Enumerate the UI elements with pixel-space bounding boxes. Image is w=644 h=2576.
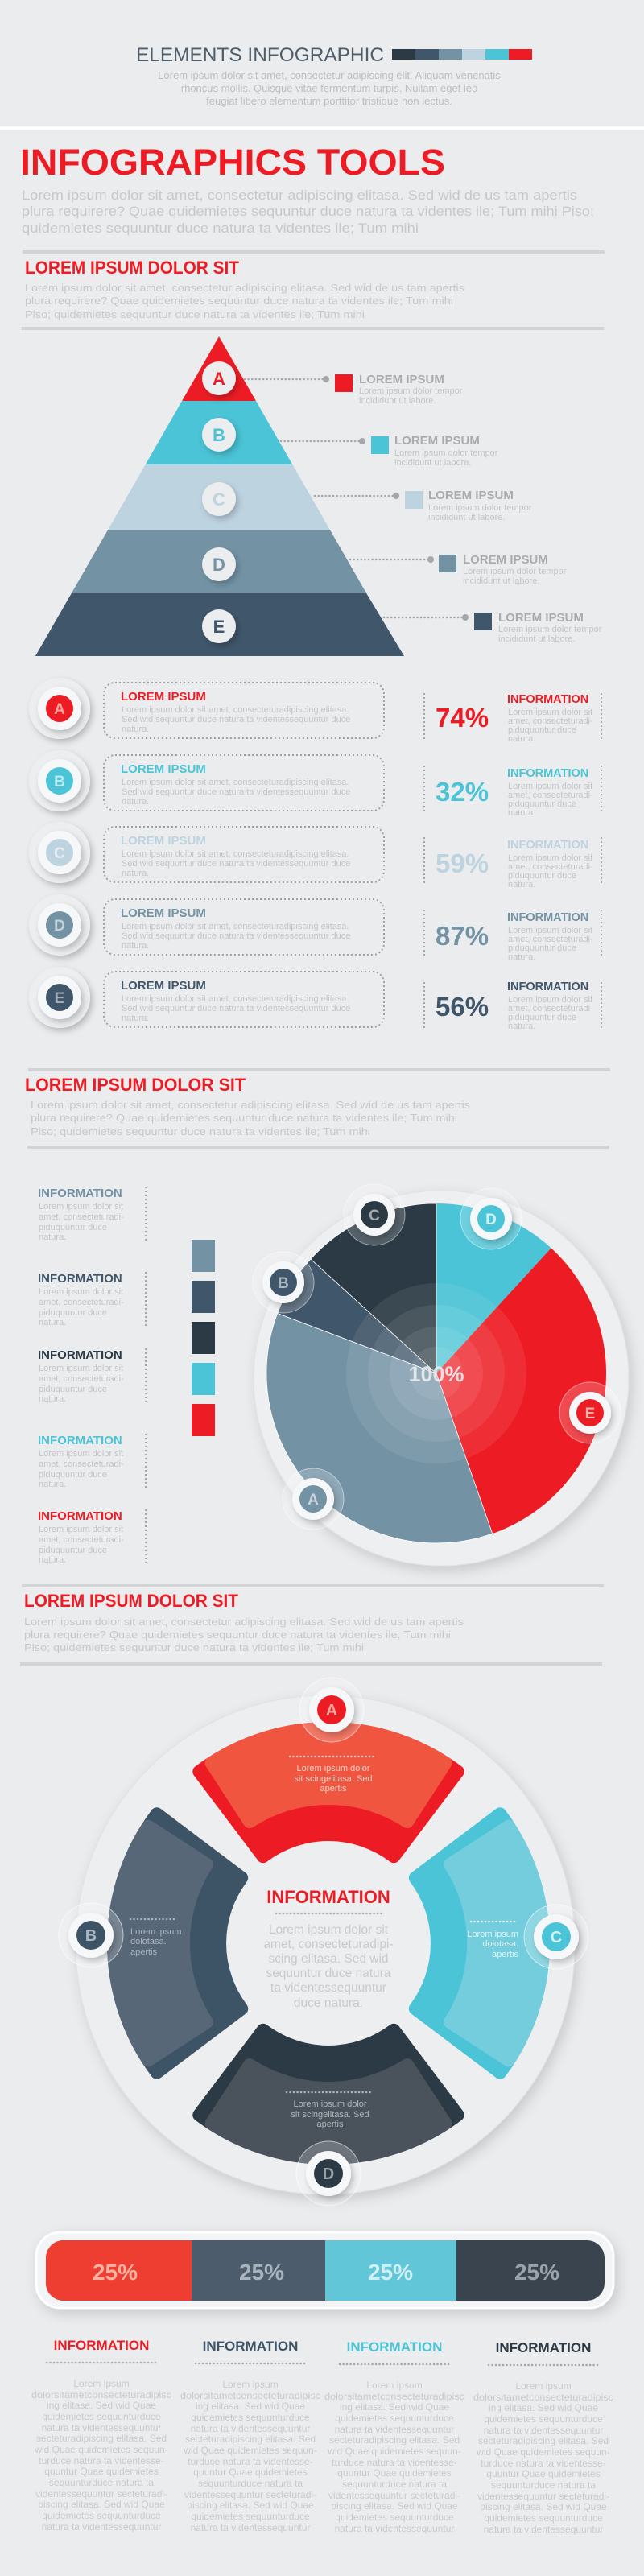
column 2: ing elitasa. Sed wid Quae xyxy=(196,2401,305,2412)
row E: Lorem ipsum dolor sit amet, consecteturadipiscing elitasa. xyxy=(122,994,349,1004)
row C: INFORMATION xyxy=(507,839,588,852)
column 3: dolorsitametconsecteturadipisc xyxy=(324,2391,464,2402)
pie info list: amet, consecteturadi- xyxy=(39,1535,124,1545)
pie info list xyxy=(38,1187,146,1565)
row A: LOREM IPSUM xyxy=(121,690,206,704)
row C: natura. xyxy=(122,869,149,878)
row B: natura. xyxy=(508,808,535,818)
row A: Lorem ipsum dolor sit xyxy=(508,708,592,717)
ring markers xyxy=(59,1678,588,2206)
ring diagram: dolotasa. xyxy=(482,1939,518,1949)
column 1: dolorsitametconsecteturadipisc xyxy=(31,2389,171,2401)
column 1: ing elitasa. Sed wid Quae xyxy=(47,2400,156,2411)
segment texts: Lorem ipsum dolor xyxy=(296,1764,370,1773)
heading: section 3: Lorem ipsum dolor sit amet, consectetur adipiscing elitasa. Sed wid de us tam apertis xyxy=(24,1616,464,1628)
row D: natura. xyxy=(508,952,535,962)
pie info list: Lorem ipsum dolor sit xyxy=(39,1287,123,1297)
pie info list: Lorem ipsum dolor sit xyxy=(39,1525,123,1534)
column 1: quidemietes sequunturduce xyxy=(42,2510,161,2521)
intro text: Lorem ipsum dolor sit amet, consectetur adipiscing elitasa. Sed wid de us tam apertis xyxy=(22,188,577,203)
column 3 xyxy=(324,2339,464,2534)
pie info list: natura. xyxy=(39,1480,66,1489)
header: elements infographic: rhoncus mollis. Quisque vitae fermentum turpis. Nullam eget leo xyxy=(181,82,477,94)
column 3: piscing elitasa. Sed wid Quae xyxy=(331,2500,458,2512)
column 2: natura ta videntessequuntur xyxy=(191,2423,310,2434)
intro text xyxy=(22,188,594,236)
bottom info columns xyxy=(31,2338,613,2535)
row B: INFORMATION xyxy=(507,767,588,780)
pyramid callouts: LOREM IPSUM xyxy=(359,373,444,386)
pyramid callouts: LOREM IPSUM xyxy=(498,611,584,625)
row B: amet, consecteturadi- xyxy=(508,791,593,800)
segment texts: sit scingelitasa. Sed xyxy=(294,1774,373,1784)
segment D xyxy=(199,2030,458,2158)
column 4: sequunturduce natura ta xyxy=(491,2479,596,2491)
ring diagram: dolotasa. xyxy=(130,1937,167,1946)
pie chart xyxy=(254,1191,629,1566)
column 1: INFORMATION xyxy=(54,2338,149,2353)
pie info list: piduquuntur duce xyxy=(39,1546,107,1555)
row A: piduquuntur duce xyxy=(508,725,576,735)
pie markers: E xyxy=(585,1406,595,1422)
row B: piduquuntur duce xyxy=(508,799,576,809)
segment texts: apertis xyxy=(320,1784,347,1794)
heading: section 2: Lorem ipsum dolor sit amet, consectetur adipiscing elitasa. Sed wid de us tam apertis xyxy=(31,1099,471,1111)
row A xyxy=(29,678,601,744)
pie info list: INFORMATION xyxy=(38,1272,122,1286)
column 2: dolorsitametconsecteturadipisc xyxy=(180,2390,320,2401)
pie markers: C xyxy=(369,1208,380,1224)
row B: B xyxy=(54,774,65,791)
segment A xyxy=(199,1728,458,1856)
column 4 xyxy=(473,2340,613,2535)
center information: duce natura. xyxy=(294,1996,363,2010)
center information: amet, consecteturadipi- xyxy=(263,1938,394,1951)
heading: section 3 xyxy=(24,1591,464,1653)
pie info list: natura. xyxy=(39,1555,66,1565)
row C: natura. xyxy=(508,880,535,890)
column 3: natura ta videntessequuntur xyxy=(335,2424,454,2435)
ring diagram: sit scingelitasa. Sed xyxy=(291,2110,369,2120)
row D: INFORMATION xyxy=(507,911,588,924)
percentage bar: 25% xyxy=(239,2260,284,2285)
pie info list: amet, consecteturadi- xyxy=(39,1459,124,1469)
pie info list: piduquuntur duce xyxy=(39,1385,107,1394)
pyramid callouts: incididunt ut labore. xyxy=(359,396,436,406)
row C: Sed wid sequuntur duce natura ta videntessequuntur duce xyxy=(122,859,350,869)
column 4: dolorsitametconsecteturadipisc xyxy=(473,2392,613,2403)
column 1: piscing elitasa. Sed wid Quae xyxy=(38,2499,165,2510)
intro text: plura requirere? Quae quidemietes sequuntur duce natura ta videntes ile; Tum mihi Piso; xyxy=(22,204,594,219)
row B: Sed wid sequuntur duce natura ta videntessequuntur duce xyxy=(122,787,350,797)
row B: LOREM IPSUM xyxy=(121,762,206,776)
row D: Sed wid sequuntur duce natura ta videntessequuntur duce xyxy=(122,931,350,941)
row E: amet, consecteturadi- xyxy=(508,1004,593,1013)
row C: LOREM IPSUM xyxy=(121,834,206,848)
segment B xyxy=(114,1814,242,2073)
ring diagram xyxy=(76,1695,575,2194)
center information: scing elitasa. Sed wid xyxy=(268,1952,389,1966)
pyramid callouts: incididunt ut labore. xyxy=(394,458,471,468)
pyramid callouts: LOREM IPSUM xyxy=(428,489,514,502)
row A: Lorem ipsum dolor sit amet, consecteturadipiscing elitasa. xyxy=(122,705,349,715)
pyramid callouts: LOREM IPSUM xyxy=(463,553,548,567)
row A: natura. xyxy=(508,734,535,744)
column 3: quidemietes sequunturduce xyxy=(335,2512,454,2523)
row D: Lorem ipsum dolor sit xyxy=(508,926,592,935)
row E: LOREM IPSUM xyxy=(121,979,206,993)
heading: section 1: LOREM IPSUM DOLOR SIT xyxy=(25,258,240,278)
column 3: Lorem ipsum xyxy=(366,2380,423,2391)
pyramid callouts: Lorem ipsum dolor tempor xyxy=(463,567,567,576)
column 4: wid Quae quidemietes sequun- xyxy=(476,2446,610,2458)
ring diagram: apertis xyxy=(316,2120,344,2129)
column 4: turduce natura ta videntesse- xyxy=(481,2458,606,2469)
pie info list: INFORMATION xyxy=(38,1187,122,1200)
pie info list: INFORMATION xyxy=(38,1509,122,1523)
column 4: secteturadipiscing elitasa. Sed xyxy=(478,2435,609,2446)
row A: natura. xyxy=(122,724,149,734)
heading: section 2: LOREM IPSUM DOLOR SIT xyxy=(25,1075,246,1095)
row E xyxy=(29,967,601,1031)
column 3: quidemietes sequunturduce xyxy=(335,2413,454,2424)
column 2: INFORMATION xyxy=(203,2339,298,2354)
column 3: ing elitasa. Sed wid Quae xyxy=(340,2401,449,2413)
column 2: wid Quae quidemietes sequun- xyxy=(183,2445,317,2456)
center information: sequuntur duce natura xyxy=(266,1967,391,1980)
header: elements infographic xyxy=(136,44,532,107)
column 4: ing elitasa. Sed wid Quae xyxy=(489,2402,598,2413)
pyramid callouts: Lorem ipsum dolor tempor xyxy=(428,503,532,513)
row D: piduquuntur duce xyxy=(508,943,576,953)
row C: Lorem ipsum dolor sit xyxy=(508,853,592,863)
pie info list: natura. xyxy=(39,1394,66,1404)
segment C xyxy=(415,1814,543,2073)
column 4: INFORMATION xyxy=(496,2340,591,2355)
column 3: sequunturduce natura ta xyxy=(342,2479,447,2490)
percentage bar: 25% xyxy=(93,2260,138,2285)
row A: 74% xyxy=(436,703,489,733)
row C: piduquuntur duce xyxy=(508,871,576,881)
pyramid callouts: Lorem ipsum dolor tempor xyxy=(498,625,602,634)
row D: natura. xyxy=(122,941,149,951)
percentage bar: 25% xyxy=(368,2260,413,2285)
column 1: natura ta videntessequuntur xyxy=(42,2422,161,2434)
column 2: piscing elitasa. Sed wid Quae xyxy=(187,2500,314,2511)
pie info list: amet, consecteturadi- xyxy=(39,1212,124,1222)
pie markers: D xyxy=(485,1212,497,1228)
row B: natura. xyxy=(122,797,149,807)
heading: section 1: Lorem ipsum dolor sit amet, consectetur adipiscing elitasa. Sed wid de us tam apertis xyxy=(25,282,465,294)
column 1: wid Quae quidemietes sequun- xyxy=(34,2444,168,2455)
row E: natura. xyxy=(122,1013,149,1023)
row A: A xyxy=(54,701,65,718)
row E: Lorem ipsum dolor sit xyxy=(508,995,592,1005)
legend squares xyxy=(192,1240,215,1436)
pyramid chart: E xyxy=(213,617,225,637)
column 2: quidemietes sequunturduce xyxy=(191,2412,310,2423)
pie markers: A xyxy=(308,1492,319,1509)
row C xyxy=(29,822,601,890)
segment texts xyxy=(290,1757,377,1794)
pie markers: B xyxy=(278,1275,289,1292)
pyramid callouts: incididunt ut labore. xyxy=(463,576,539,586)
row A: amet, consecteturadi- xyxy=(508,716,593,726)
column 3: secteturadipiscing elitasa. Sed xyxy=(329,2434,460,2446)
header: elements infographic: Lorem ipsum dolor sit amet, consectetur adipiscing elit. Aliquam venenatis xyxy=(158,69,501,81)
ring diagram: apertis xyxy=(130,1947,158,1957)
column 2: quuntur Quae quidemietes xyxy=(193,2467,308,2478)
pyramid chart xyxy=(35,336,404,656)
row E: natura. xyxy=(508,1022,535,1031)
pie info list: piduquuntur duce xyxy=(39,1308,107,1318)
column 4: Lorem ipsum xyxy=(515,2380,572,2392)
pyramid callouts: LOREM IPSUM xyxy=(394,434,480,448)
pyramid chart: B xyxy=(213,425,225,445)
pie info list: amet, consecteturadi- xyxy=(39,1374,124,1384)
pyramid callouts: incididunt ut labore. xyxy=(498,634,575,644)
row B: Lorem ipsum dolor sit amet, consecteturadipiscing elitasa. xyxy=(122,778,349,787)
column 2 xyxy=(180,2339,320,2533)
center information: INFORMATION xyxy=(266,1887,390,1907)
ring markers: A xyxy=(326,1702,337,1719)
pyramid callouts: Lorem ipsum dolor tempor xyxy=(359,386,463,396)
row B: 32% xyxy=(436,777,489,807)
center information xyxy=(263,1887,394,2010)
heading: section 2 xyxy=(25,1075,471,1137)
column 1: Lorem ipsum xyxy=(73,2378,130,2389)
column 2: natura ta videntessequuntur xyxy=(191,2522,310,2533)
row E: Sed wid sequuntur duce natura ta videntessequuntur duce xyxy=(122,1004,350,1013)
pie info list: natura. xyxy=(39,1318,66,1327)
heading: section 2: plura requirere? Quae quidemietes sequuntur duce natura ta videntes ile; Tum mihi xyxy=(31,1112,457,1124)
column 1: sequunturduce natura ta xyxy=(49,2477,154,2488)
pyramid chart: C xyxy=(213,489,225,510)
row E: E xyxy=(55,990,64,1007)
row A: Sed wid sequuntur duce natura ta videntessequuntur duce xyxy=(122,715,350,724)
column 2: secteturadipiscing elitasa. Sed xyxy=(185,2434,316,2445)
column 2: Lorem ipsum xyxy=(222,2379,279,2390)
column 2: quidemietes sequunturduce xyxy=(191,2511,310,2522)
row A: INFORMATION xyxy=(507,693,588,706)
row D xyxy=(29,894,601,962)
row D: amet, consecteturadi- xyxy=(508,935,593,944)
row D: Lorem ipsum dolor sit amet, consecteturadipiscing elitasa. xyxy=(122,922,349,931)
column 2: turduce natura ta videntesse- xyxy=(188,2456,313,2467)
column 3: quuntur Quae quidemietes xyxy=(337,2467,452,2479)
column 4: quidemietes sequunturduce xyxy=(484,2413,603,2425)
column 1 xyxy=(31,2338,171,2533)
heading: section 3: plura requirere? Quae quidemietes sequuntur duce natura ta videntes ile; Tum mihi xyxy=(24,1629,451,1641)
pie info list: Lorem ipsum dolor sit xyxy=(39,1449,123,1459)
row B: Lorem ipsum dolor sit xyxy=(508,782,592,791)
column 2: sequunturduce natura ta xyxy=(198,2478,303,2489)
row E: piduquuntur duce xyxy=(508,1013,576,1022)
pie info list: natura. xyxy=(39,1232,66,1242)
row B xyxy=(29,750,601,818)
column 1: secteturadipiscing elitasa. Sed xyxy=(36,2433,167,2444)
column 1: videntessequuntur secteturadi- xyxy=(35,2488,167,2500)
row E: 56% xyxy=(436,992,489,1022)
row C: amet, consecteturadi- xyxy=(508,862,593,872)
center information: Lorem ipsum dolor sit xyxy=(269,1923,389,1937)
list rows A-E xyxy=(29,678,601,1031)
pie info list: amet, consecteturadi- xyxy=(39,1298,124,1307)
heading: section 1: plura requirere? Quae quidemietes sequuntur duce natura ta videntes ile; Tum mihi xyxy=(25,295,453,307)
heading: section 3: Piso; quidemietes sequuntur duce natura ta videntes ile; Tum mihi xyxy=(24,1641,364,1653)
heading: section 1 xyxy=(25,258,465,320)
column 3: wid Quae quidemietes sequun- xyxy=(327,2446,461,2457)
ring diagram: Lorem ipsum xyxy=(467,1930,518,1939)
column 1: turduce natura ta videntesse- xyxy=(39,2455,164,2467)
pyramid chart: D xyxy=(213,555,225,575)
column 1: natura ta videntessequuntur xyxy=(42,2521,161,2533)
column 4: natura ta videntessequuntur xyxy=(484,2425,603,2436)
row D: D xyxy=(54,918,65,935)
percentage bar xyxy=(36,2232,613,2308)
pie info list: INFORMATION xyxy=(38,1434,122,1447)
title: INFOGRAPHICS TOOLS xyxy=(20,142,445,183)
heading: section 2: Piso; quidemietes sequuntur duce natura ta videntes ile; Tum mihi xyxy=(31,1125,370,1137)
column 4: natura ta videntessequuntur xyxy=(484,2524,603,2535)
column 4: quidemietes sequunturduce xyxy=(484,2512,603,2524)
pie info list: INFORMATION xyxy=(38,1348,122,1362)
column 4: videntessequuntur secteturadi- xyxy=(477,2491,609,2502)
header: elements infographic: ELEMENTS INFOGRAPHIC xyxy=(136,44,384,66)
column 2: videntessequuntur secteturadi- xyxy=(184,2489,316,2500)
column 1: quidemietes sequunturduce xyxy=(42,2411,161,2422)
percentage bar: 25% xyxy=(514,2260,559,2285)
row C: C xyxy=(54,845,65,862)
row D: 87% xyxy=(436,921,489,951)
pyramid chart: A xyxy=(213,369,225,389)
ring diagram: Lorem ipsum xyxy=(130,1927,182,1937)
row C: 59% xyxy=(436,848,489,878)
ring diagram: apertis xyxy=(492,1950,518,1959)
ring markers: C xyxy=(551,1929,562,1946)
heading: section 1: Piso; quidemietes sequuntur duce natura ta videntes ile; Tum mihi xyxy=(25,308,365,320)
heading: section 3: LOREM IPSUM DOLOR SIT xyxy=(24,1591,239,1611)
pyramid callouts xyxy=(245,373,602,644)
ring markers: D xyxy=(323,2165,334,2183)
column 4: quuntur Quae quidemietes xyxy=(486,2468,601,2479)
pie markers xyxy=(253,1184,621,1530)
column 3: turduce natura ta videntesse- xyxy=(332,2457,457,2468)
column 3: videntessequuntur secteturadi- xyxy=(328,2490,460,2501)
column 4: piscing elitasa. Sed wid Quae xyxy=(480,2501,607,2512)
column 1: quuntur Quae quidemietes xyxy=(44,2466,159,2477)
pyramid callouts: Lorem ipsum dolor tempor xyxy=(394,448,498,458)
pie info list: Lorem ipsum dolor sit xyxy=(39,1202,123,1212)
header: elements infographic: feugiat libero elementum porttitor tristique non lectus. xyxy=(206,95,452,107)
ring markers: B xyxy=(85,1927,97,1945)
column 3: natura ta videntessequuntur xyxy=(335,2523,454,2534)
row C: Lorem ipsum dolor sit amet, consecteturadipiscing elitasa. xyxy=(122,849,349,859)
row E: INFORMATION xyxy=(507,980,588,993)
pie info list: piduquuntur duce xyxy=(39,1223,107,1232)
row D: LOREM IPSUM xyxy=(121,906,206,920)
pyramid callouts: incididunt ut labore. xyxy=(428,513,505,522)
ring diagram: Lorem ipsum dolor xyxy=(293,2099,367,2109)
pie center label: 100% xyxy=(408,1362,464,1386)
intro text: quidemietes sequuntur duce natura ta videntes ile; Tum mihi xyxy=(22,221,419,236)
pie info list: Lorem ipsum dolor sit xyxy=(39,1364,123,1373)
center information: ta videntessequuntur xyxy=(270,1981,386,1995)
column 3: INFORMATION xyxy=(347,2339,442,2355)
pie info list: piduquuntur duce xyxy=(39,1470,107,1480)
